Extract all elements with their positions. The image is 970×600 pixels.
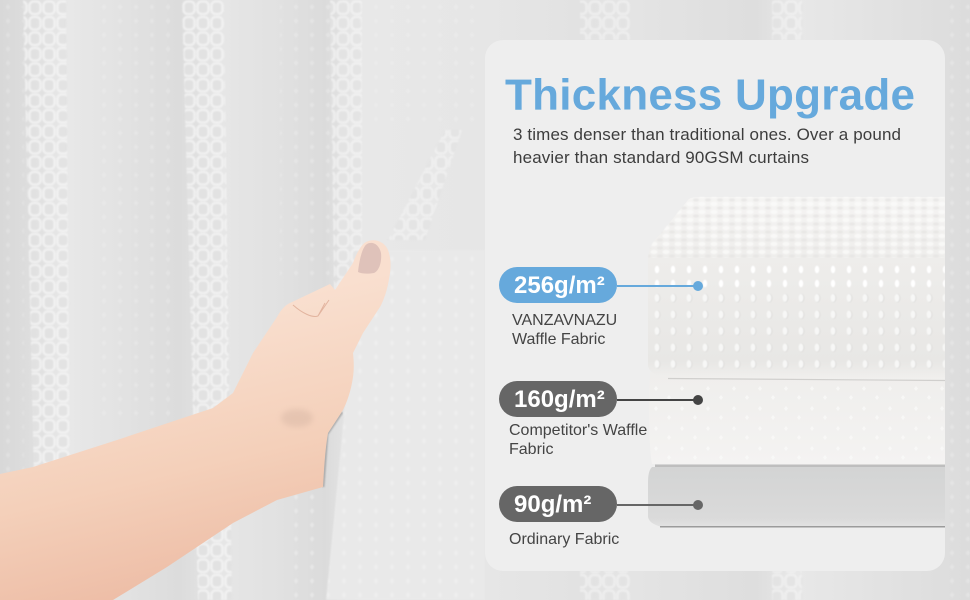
- callout: 256 g/m²: Waffle Fabric: [512, 331, 605, 348]
- icon: wrist shadow: [281, 409, 313, 427]
- description text: heavier than standard 90GSM curtains: [513, 148, 809, 167]
- callout: 256 g/m²: VANZAVNAZU: [512, 312, 617, 329]
- callout: 90 g/m²: 90g/m²: [514, 491, 591, 518]
- competitor fabric layer: [654, 386, 945, 467]
- ordinary fabric layer: [648, 467, 945, 528]
- title: Thickness Upgrade: [505, 70, 915, 120]
- description text: 3 times denser than traditional ones. Over a pound: [513, 125, 901, 144]
- callout: 160 g/m²: 160g/m²: [514, 386, 605, 413]
- panel: thickness upgrade: [485, 40, 945, 571]
- fabric stack: [648, 197, 945, 528]
- icon: finger crease: [293, 300, 329, 316]
- callout: 256 g/m²: [499, 267, 703, 348]
- description text: [513, 125, 901, 167]
- callout: 90 g/m²: Ordinary Fabric: [509, 531, 619, 548]
- callout: 160 g/m²: [499, 381, 703, 458]
- callout: 160 g/m²: Competitor's Waffle: [509, 422, 647, 439]
- icon: hand pulling curtain: [0, 240, 391, 600]
- callout: 256 g/m²: 256g/m²: [514, 272, 605, 299]
- callout: 90 g/m²: [499, 486, 703, 548]
- callout: 160 g/m²: Fabric: [509, 441, 553, 458]
- icon: thumb nail: [358, 243, 381, 274]
- vanzavnazu waffle fabric layer: [648, 197, 945, 380]
